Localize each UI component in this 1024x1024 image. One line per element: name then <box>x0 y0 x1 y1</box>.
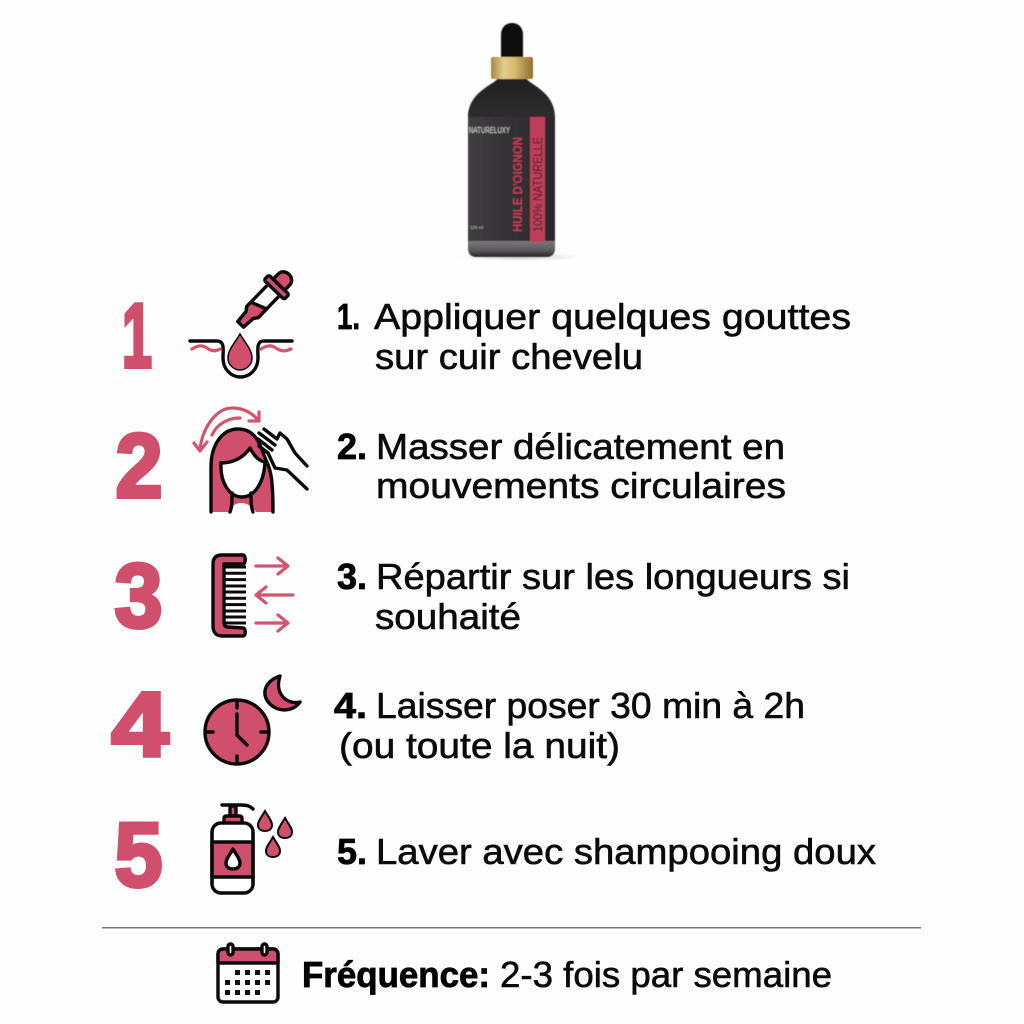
step 5 icon: shampoo bottle and drops <box>212 805 292 893</box>
step 4 icon: clock and moon <box>205 676 300 764</box>
step 3 text <box>337 556 850 637</box>
step 1 text: 1. <box>337 296 360 337</box>
step 1 text: Appliquer quelques gouttes <box>374 296 851 337</box>
product bottle: NATURELUXY <box>469 125 510 135</box>
step 3 text: 3. <box>337 556 367 597</box>
step 1 text <box>337 296 851 377</box>
step 4 text: (ou toute la nuit) <box>339 725 620 766</box>
frequency text <box>302 954 832 995</box>
step 4 text: Laisser poser 30 min à 2h <box>376 685 805 726</box>
step 4 text: 4. <box>334 685 367 726</box>
step 5 number: 5 <box>114 805 162 906</box>
step 2 text <box>337 426 786 506</box>
icon: calendar <box>218 944 278 1002</box>
step 2 text: mouvements circulaires <box>376 465 786 506</box>
product bottle: 100 ml <box>470 225 484 230</box>
step 1 number: 1 <box>122 286 152 387</box>
step 4 number: 4 <box>112 675 169 776</box>
step 2 icon: scalp massage <box>194 408 307 512</box>
step 1 icon: dropper on scalp <box>190 265 299 377</box>
step 3 icon: comb with arrows <box>213 555 293 636</box>
product bottle: 100% NATURELLE <box>531 137 545 232</box>
step 3 text: Répartir sur les longueurs si <box>376 556 850 597</box>
step 2 text: 2. <box>337 426 367 467</box>
step 2 text: Masser délicatement en <box>376 426 785 467</box>
step 5 text: Laver avec shampooing doux <box>376 831 876 872</box>
product bottle <box>458 23 582 261</box>
step 3 text: souhaité <box>375 596 521 637</box>
step 2 number: 2 <box>116 416 162 517</box>
step 3 number: 3 <box>114 546 162 647</box>
step 1 text: sur cuir chevelu <box>375 336 643 377</box>
step 5 text: 5. <box>337 831 367 872</box>
frequency text: 2-3 fois par semaine <box>500 954 832 995</box>
frequency text: Fréquence: <box>302 954 490 995</box>
product bottle: HUILE D'OIGNON <box>510 137 525 232</box>
step 4 text <box>334 685 805 766</box>
